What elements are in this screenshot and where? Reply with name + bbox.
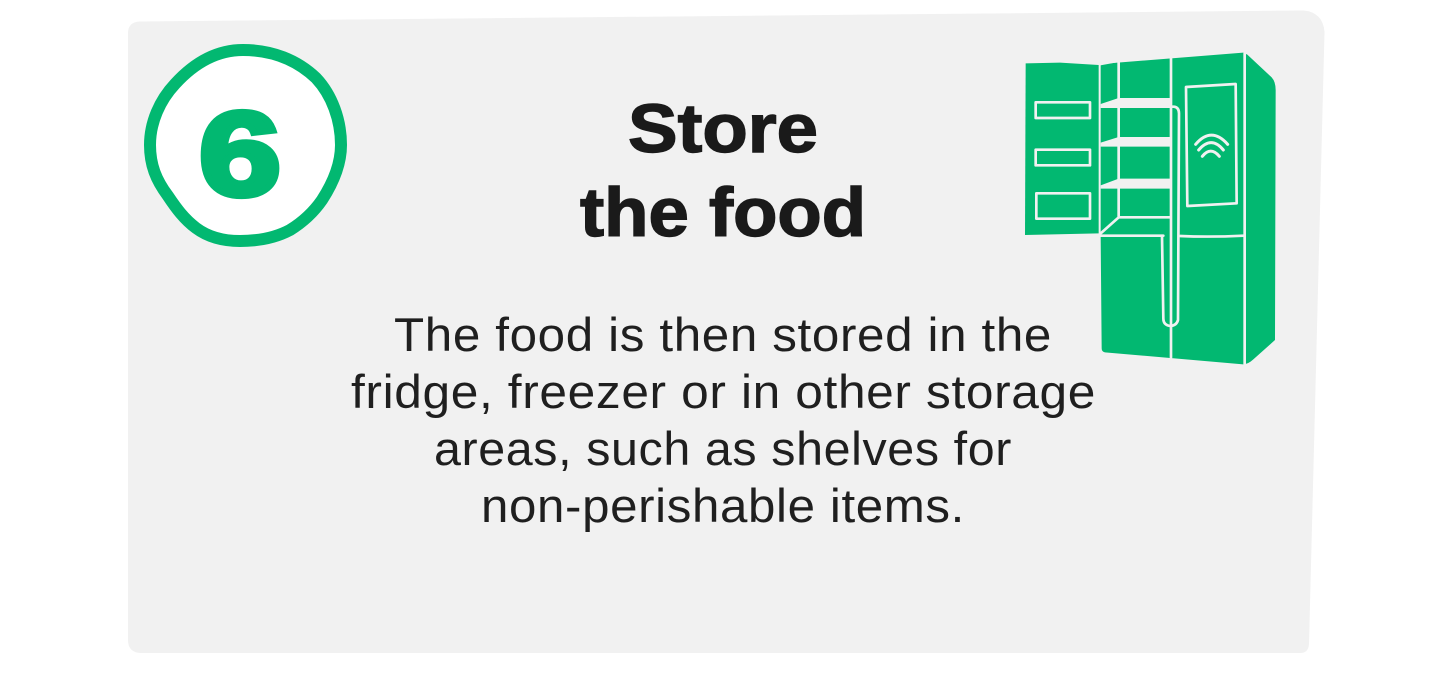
heading: the food xyxy=(580,174,866,251)
body text xyxy=(351,308,1096,532)
handle xyxy=(1162,107,1179,326)
body text: fridge, freezer or in other storage xyxy=(351,365,1096,418)
wifi symbol xyxy=(1196,135,1228,156)
heading: Store xyxy=(628,90,818,167)
door shelves xyxy=(1036,102,1090,118)
icon: open smart fridge xyxy=(1025,53,1276,364)
body text: areas, such as shelves for xyxy=(434,422,1012,475)
shelves xyxy=(1101,98,1171,189)
panel: card background xyxy=(128,10,1324,653)
step number badge xyxy=(150,50,341,241)
horizontal split xyxy=(1101,232,1243,241)
interior lines xyxy=(1101,61,1171,233)
fridge body xyxy=(1101,53,1276,364)
heading xyxy=(580,90,866,251)
body text: The food is then stored in the xyxy=(394,308,1052,361)
body text: non-perishable items. xyxy=(481,479,965,532)
number 6: 6 xyxy=(199,88,281,221)
fridge left door xyxy=(1025,63,1099,235)
display xyxy=(1186,84,1237,206)
